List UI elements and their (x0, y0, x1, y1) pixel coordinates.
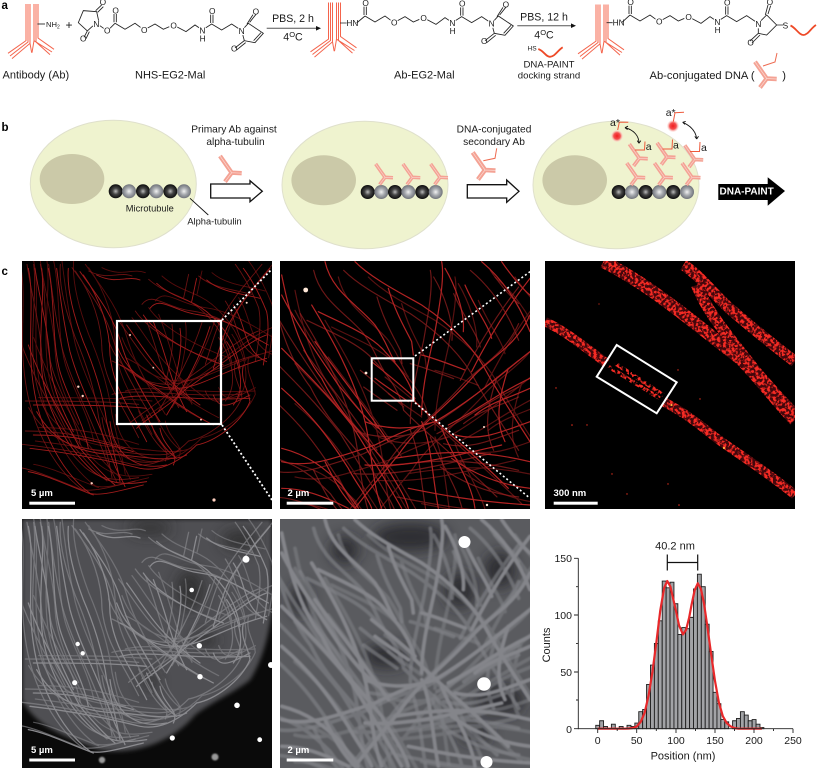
zoom lines 1 (222, 269, 272, 500)
reaction arrow 1: O (289, 30, 295, 39)
molecule: NHS-EG2-Mal: O (104, 25, 111, 35)
y tick labels: 0 (566, 724, 572, 736)
x tick labels: 150 (706, 735, 724, 747)
scale bar 2 um bottom (287, 745, 333, 762)
cell 3 (533, 121, 699, 249)
label primary Ab: Primary Ab against (191, 125, 277, 136)
molecule: Ab-EG2-Mal: O (481, 36, 488, 46)
reaction arrow 1: C (295, 32, 303, 44)
arrow 2 (467, 180, 519, 202)
molecule: Ab-conjugated DNA: S (783, 20, 789, 30)
y tick labels: 50 (560, 667, 572, 679)
imager strands and fluorophores: a* (666, 107, 676, 119)
scale bar 300 nm: 300 nm (554, 488, 586, 499)
x tick labels: 250 (784, 735, 802, 747)
y axis title: Counts (541, 627, 553, 662)
label secondary Ab: DNA-conjugated (457, 125, 531, 136)
antibody (8, 4, 54, 59)
docking strand: docking strand (518, 70, 580, 82)
docking strand: DNA-PAINT (524, 60, 575, 70)
scale bar 300 nm (554, 488, 598, 505)
molecule: Ab-EG2-Mal: N (489, 19, 495, 29)
antibody stacks with docking strands (627, 140, 703, 185)
reaction arrow 2: 4 (534, 30, 540, 42)
image: diffraction-limited zoom (270, 519, 543, 770)
molecule: NHS-EG2-Mal: O (231, 43, 238, 53)
docking strand: HS (528, 46, 537, 52)
label NH2: NH (46, 20, 57, 29)
y tick labels: 150 (554, 553, 572, 565)
molecule: NHS-EG2-Mal: N (93, 19, 99, 29)
arrow 1 (211, 181, 262, 202)
scale bar 5 um bottom (29, 745, 75, 762)
panel b: labeling workflow (2, 107, 785, 249)
x tick labels: 50 (631, 735, 643, 747)
mini conjugated antibody icon (755, 53, 777, 88)
label Ab-EG2-Mal: Ab-EG2-Mal (394, 70, 455, 82)
icon: primary antibody (220, 156, 242, 182)
image: super-resolution zoom (280, 261, 530, 509)
scale bar 5 um bottom: 5 µm (31, 745, 53, 756)
DNA-PAINT arrow (718, 177, 785, 206)
reaction arrow 1: 4 (283, 32, 289, 44)
peak distance bracket: 40.2 nm (655, 540, 695, 552)
x axis title: Position (nm) (651, 750, 715, 762)
antibody 3 (578, 4, 624, 59)
reaction arrow 2 (517, 12, 576, 42)
molecule: Ab-conjugated DNA: O (747, 38, 754, 48)
label alpha-tubulin: Alpha-tubulin (187, 216, 242, 226)
x tick labels (595, 735, 802, 747)
DNA-PAINT arrow: DNA-PAINT (720, 186, 774, 198)
reaction arrow 2: C (546, 30, 554, 42)
reaction arrow 1 (267, 13, 321, 44)
inset box 1 (117, 321, 221, 424)
scale bar 2 um (287, 488, 333, 505)
cell 1 (30, 120, 196, 248)
image: super-resolution overview (20, 261, 275, 509)
reaction arrow 2: PBS, 12 h (520, 12, 568, 24)
label secondary Ab: secondary Ab (463, 137, 525, 148)
imager strands and fluorophores: a (673, 140, 679, 152)
closing bracket: ) (782, 70, 786, 82)
molecule: Ab-conjugated DNA: N (755, 19, 761, 29)
molecule: Ab-EG2-Mal: HN (346, 18, 358, 28)
image: diffraction-limited overview (20, 519, 275, 768)
plus sign: + (66, 18, 73, 32)
icon: secondary antibody (473, 148, 497, 179)
rotated inset box (597, 345, 677, 413)
fit curve (598, 581, 762, 729)
molecule: NHS-EG2-Mal (78, 0, 263, 53)
x tick labels: 100 (667, 735, 685, 747)
molecule: NHS-EG2-Mal: O (80, 34, 87, 44)
DNA strand on conjugate (790, 25, 816, 35)
scale bar 5 um: 5 µm (31, 488, 53, 499)
panel label c: c (2, 266, 8, 278)
cell 2 (282, 121, 448, 249)
label NH2: 2 (57, 24, 60, 30)
peak distance bracket (655, 540, 698, 570)
molecule: Ab-conjugated DNA (607, 0, 789, 48)
x tick labels: 0 (595, 735, 601, 747)
leader alpha-tubulin (190, 198, 208, 215)
antibody 2 (310, 2, 356, 57)
axes (574, 558, 793, 733)
panel label b: b (2, 122, 9, 134)
scale bar 5 um (29, 488, 75, 505)
y tick labels: 100 (554, 610, 572, 622)
panel label a: a (2, 0, 8, 12)
molecule: NHS-EG2-Mal: O (253, 7, 260, 17)
scale bar 2 um: 2 µm (288, 488, 309, 499)
imager strands and fluorophores (610, 107, 707, 154)
y tick labels (554, 553, 572, 736)
panel a: conjugation chemistry (2, 0, 816, 88)
label antibody: Antibody (Ab) (2, 70, 69, 82)
x tick labels: 200 (745, 735, 763, 747)
inset box 2 (372, 358, 413, 401)
chart: localization histogram (541, 540, 802, 762)
molecule: Ab-EG2-Mal (340, 0, 513, 46)
imager strands and fluorophores: a* (610, 117, 620, 129)
docking strand (518, 46, 580, 82)
label NHS-EG2-Mal: NHS-EG2-Mal (135, 70, 205, 82)
zoom lines 2 (415, 272, 530, 498)
panel c: imaging (2, 261, 802, 770)
reaction arrow 1: PBS, 2 h (272, 13, 314, 25)
imager strands and fluorophores: a (646, 141, 652, 153)
reaction arrow 2: O (540, 28, 546, 37)
binding double arrows (625, 121, 698, 143)
image: single microtubule (545, 261, 795, 509)
histogram bars (596, 574, 764, 729)
molecule: Ab-conjugated DNA: HN (613, 17, 625, 27)
molecule: NHS-EG2-Mal: N (239, 26, 245, 36)
label Ab-conjugated DNA: Ab-conjugated DNA ( (650, 70, 755, 82)
imager strands and fluorophores: a (701, 142, 707, 154)
scale bar 2 um bottom: 2 µm (288, 745, 309, 756)
label primary Ab: alpha-tubulin (206, 137, 265, 148)
label microtubule: Microtubule (126, 204, 174, 214)
